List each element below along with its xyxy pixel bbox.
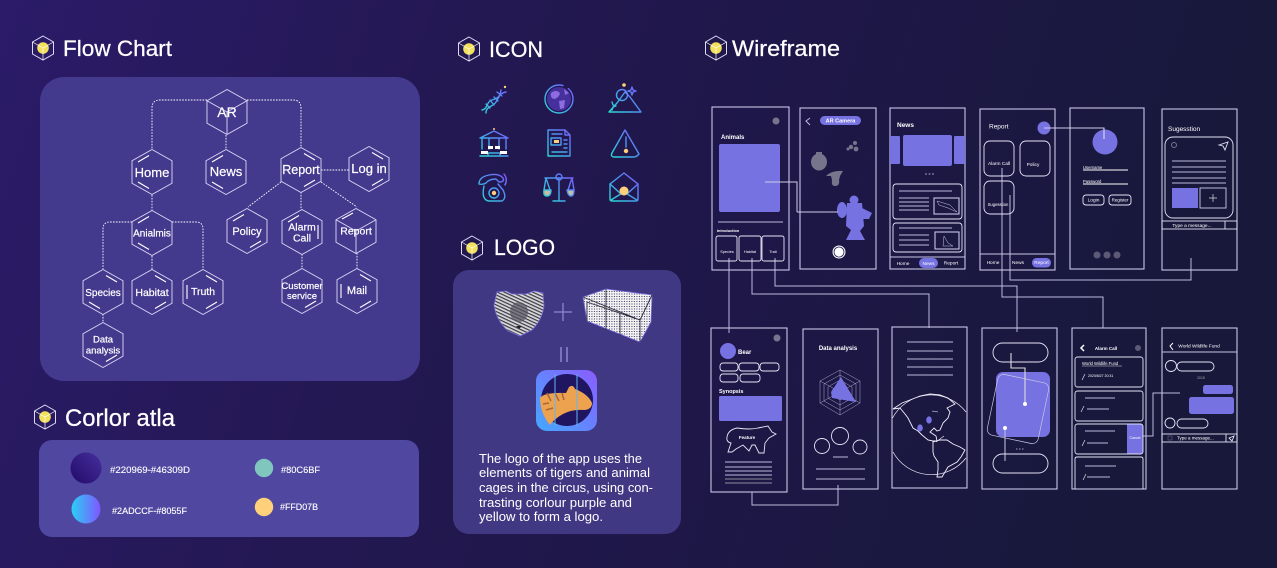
node: Report sub — [336, 208, 376, 254]
icon: document — [548, 130, 570, 156]
screen: News: Home — [897, 261, 910, 267]
screen: Sugesstion: Sugesstion — [1168, 126, 1201, 133]
node: Habitat — [132, 270, 172, 314]
icon: warning — [611, 130, 639, 157]
node: Species: Species — [85, 288, 121, 299]
screen: Log in — [1070, 108, 1144, 269]
node: Data analysis: analysis — [86, 346, 120, 356]
screen: News: Report — [944, 260, 959, 266]
screen: News: News — [897, 122, 914, 129]
icon: scales — [544, 174, 574, 201]
panel: flow chart — [40, 77, 420, 381]
swatch: yellow — [255, 498, 318, 516]
screen: Sugesstion — [1162, 109, 1237, 270]
heading: Wireframe: Wireframe — [732, 36, 840, 61]
node: Habitat: Habitat — [135, 287, 169, 299]
node: News: News — [210, 164, 243, 179]
logo description — [479, 451, 653, 524]
node: Data analysis: Data — [93, 334, 114, 346]
node: AR — [207, 90, 247, 134]
icon: DNA — [482, 86, 506, 113]
node: Customer service: service — [287, 291, 317, 302]
grey AR objects — [811, 141, 858, 186]
screen: World Wildlife Fund chat: World Wildlife Fund — [1178, 344, 1220, 350]
node: Customer service — [281, 268, 323, 314]
node: Policy — [227, 208, 267, 254]
radar chart — [820, 370, 860, 415]
logo description: cages in the circus, using con- — [479, 480, 653, 495]
screen: News — [890, 108, 965, 269]
screen: Animals: Animals — [721, 135, 745, 141]
screen: Bear: Synopsis — [719, 389, 743, 395]
logo description: The logo of the app uses the — [479, 451, 642, 466]
screen: Animals: Introduction — [717, 229, 740, 233]
node: Customer service: Customer — [281, 281, 323, 292]
node: News — [206, 150, 246, 194]
node: Data analysis — [83, 322, 123, 368]
swatch: blue purple gradient: #2ADCCF-#8055F — [112, 506, 188, 516]
icon: carousel — [480, 128, 508, 156]
screen: Animals: Habitat — [744, 250, 757, 254]
screen: Report: Alarm Call — [988, 161, 1010, 167]
screen: World Wildlife Fund chat — [1162, 328, 1237, 489]
swatch: teal: #80C6BF — [281, 465, 321, 475]
screen: Log in: Login — [1088, 198, 1100, 204]
screen: Alarm Call: World Wildlife Fund — [1082, 361, 1119, 366]
swatch: blue purple gradient — [72, 494, 188, 524]
screen: Data analysis — [803, 329, 878, 489]
screen: World Wildlife Fund chat: 2015 — [1197, 376, 1205, 380]
tiger head image — [494, 291, 544, 336]
icon: telephone — [479, 174, 506, 201]
screen: Alarm Call: Alarm Call — [1095, 346, 1117, 351]
bear outline — [727, 426, 776, 453]
screen: Report: Sugesstion — [988, 202, 1009, 207]
tiger body — [540, 386, 592, 425]
screen: Alarm Call — [1072, 328, 1146, 489]
screen: Log in: Register — [1112, 198, 1129, 202]
panel: colour atlas — [39, 440, 419, 537]
screen: Log in: Username — [1083, 165, 1103, 170]
screen: News: News — [922, 261, 935, 267]
screen: Bear: Bear — [738, 350, 752, 356]
screen: Data analysis: Data analysis — [819, 346, 858, 352]
screen: Alarm Call: 2020/8/27 20:31 — [1088, 374, 1113, 378]
node: Alarm Call: Alarm — [288, 222, 316, 234]
screen: Swipe cards — [982, 328, 1057, 489]
logo description: trasting corlour purple and — [479, 495, 632, 510]
heading: LOGO: LOGO — [494, 235, 555, 260]
screen: Sugesstion: Type a message... — [1172, 223, 1212, 229]
icon: open mail — [610, 173, 638, 201]
screen: World Wildlife Fund chat: Type a message... — [1177, 436, 1214, 440]
screen: Report — [980, 109, 1104, 270]
logo description: elements of tigers and animal — [479, 465, 650, 480]
screen: Report: Report — [989, 124, 1009, 130]
screen: Report: Policy — [1027, 162, 1040, 168]
screen: Report: Report — [1034, 260, 1049, 266]
flow chart connectors — [103, 100, 357, 323]
screen: Bear: Feature — [739, 435, 756, 440]
heading: LOGO — [462, 235, 555, 260]
screen: Animals: Trait — [769, 250, 778, 254]
node: Home — [132, 150, 172, 194]
swatch: dark purple gradient — [70, 452, 191, 484]
purple AR figure — [837, 196, 872, 240]
swatch: dark purple gradient: #220969-#46309D — [110, 465, 191, 475]
node: Anialmis: Anialmis — [133, 228, 171, 240]
screen: Globe — [892, 327, 967, 488]
heading: Corlor atla: Corlor atla — [65, 405, 176, 432]
heading: Flow Chart: Flow Chart — [63, 36, 172, 61]
screen: AR Camera — [765, 108, 876, 269]
plus sign — [554, 303, 572, 321]
node: Species — [83, 270, 123, 314]
app logo — [536, 370, 597, 431]
globe map — [892, 394, 966, 477]
logo description: yellow to form a logo. — [479, 509, 603, 524]
node: AR: AR — [217, 104, 237, 120]
icon: mountain and magnifier — [609, 83, 641, 112]
node: Report: Report — [282, 163, 320, 177]
icon: globe — [545, 85, 573, 113]
screen: Report: News — [1012, 260, 1025, 266]
node: Alarm Call: Call — [293, 232, 311, 244]
screen: Animals — [712, 107, 789, 270]
swatch: yellow: #FFD07B — [280, 502, 318, 512]
screen: AR Camera: AR Camera — [826, 118, 856, 124]
swatch: teal — [255, 459, 321, 477]
equals sign — [561, 347, 567, 362]
heading: ICON: ICON — [489, 37, 543, 62]
screen: Alarm Call: Cancel — [1130, 436, 1141, 440]
node: Mail: Mail — [347, 285, 367, 297]
node: Truth: Truth — [191, 286, 215, 298]
node: Report sub: Report — [340, 226, 372, 238]
node: Log in — [349, 146, 389, 192]
panel: logo — [453, 270, 681, 534]
screen: Log in: Password — [1083, 179, 1102, 184]
node: Anialmis — [132, 210, 172, 256]
cage image — [583, 289, 652, 342]
heading: ICON — [458, 37, 543, 62]
node: Log in: Log in — [351, 161, 387, 176]
screen: Bear — [711, 328, 787, 492]
node: Home: Home — [135, 165, 169, 180]
screen: Report: Home — [987, 260, 1000, 266]
node: Report — [281, 148, 321, 192]
node: Truth — [183, 270, 223, 314]
node: Alarm Call — [282, 210, 322, 254]
node: Mail — [337, 268, 377, 314]
wireframe connectors — [729, 168, 1191, 505]
node: Policy: Policy — [232, 226, 262, 238]
screen: Animals: Species — [720, 250, 734, 254]
